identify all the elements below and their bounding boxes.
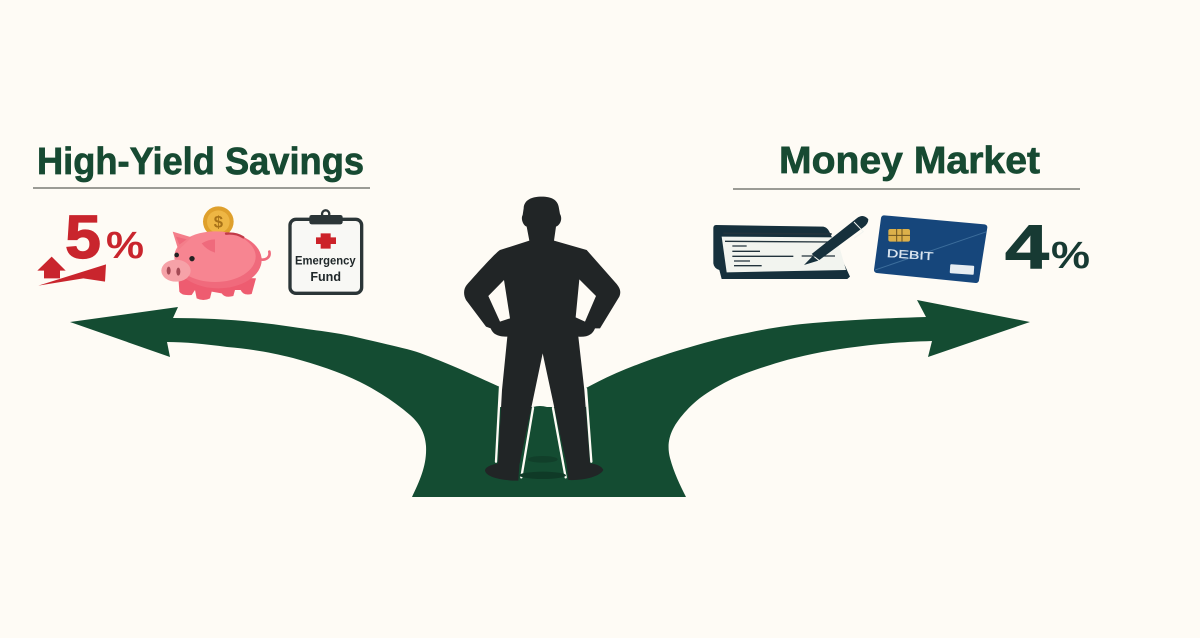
icon: debit card	[875, 218, 987, 280]
icon: piggy bank with coin: $	[214, 213, 224, 232]
icon: debit card: DEBIT	[886, 248, 934, 263]
ears	[173, 232, 192, 250]
icon: checkbook with pen	[713, 216, 868, 279]
slot	[226, 233, 243, 237]
eyes	[174, 253, 179, 257]
rate: 4 percent: 4	[1005, 213, 1050, 282]
icon: 5 percent rate with rising arrow: %	[106, 225, 144, 267]
icon: piggy bank with coin	[161, 206, 270, 300]
person silhouette standing at the fork	[464, 197, 620, 481]
coin	[203, 206, 234, 237]
legs	[178, 277, 256, 300]
icon: emergency fund clipboard: Fund	[310, 269, 341, 284]
pen	[812, 216, 868, 260]
icon: 5 percent rate with rising arrow	[37, 203, 144, 286]
snout	[161, 260, 191, 282]
forked road with two arrows	[70, 300, 1030, 497]
leg highlight outline	[496, 387, 591, 477]
red cross	[316, 233, 336, 249]
body	[175, 232, 262, 288]
tail	[260, 252, 270, 260]
heading: Money Market: Money Market	[779, 140, 1040, 182]
rate: 4 percent: %	[1051, 235, 1090, 277]
icon: emergency fund clipboard	[290, 210, 362, 293]
icon: emergency fund clipboard: Emergency	[295, 253, 356, 267]
icon: 5 percent rate with rising arrow: 5	[65, 203, 101, 271]
ground shadow	[519, 472, 566, 479]
heading: High-Yield Savings: High-Yield Savings	[37, 141, 364, 183]
body	[464, 197, 620, 481]
chip	[888, 229, 910, 242]
rate: 4 percent	[1005, 213, 1090, 282]
